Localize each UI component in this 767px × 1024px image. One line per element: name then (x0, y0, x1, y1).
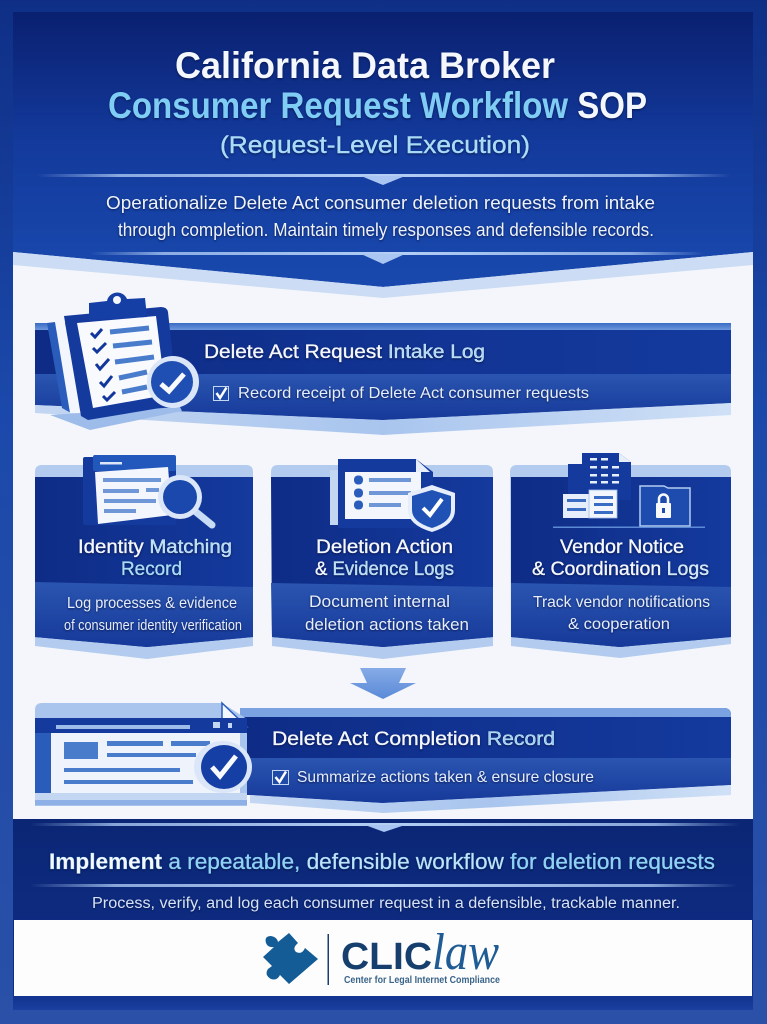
heading: Vendor Notice (560, 537, 684, 558)
panel: white content area (13, 252, 753, 820)
description (533, 594, 710, 633)
logo wordmark: CLIC (341, 936, 432, 978)
description: Log processes & evidence (67, 595, 237, 612)
panel: intake log (35, 293, 731, 435)
icon: document with magnifier (83, 455, 212, 525)
divider with pointer (30, 823, 740, 832)
logo tagline: Center for Legal Internet Compliance (344, 975, 500, 986)
icon: clipboard with checklist (47, 293, 199, 430)
logo wordmark italic: law (432, 924, 499, 981)
footer headline: Implement a repeatable, defensible workflow for deletion requests (49, 849, 715, 874)
intro text: through completion. Maintain timely responses and defensible records. (118, 220, 654, 240)
panel: completion record (35, 703, 731, 813)
subtitle: (Request-Level Execution) (220, 132, 530, 159)
description: of consumer identity verification (64, 618, 242, 634)
intro text (106, 193, 655, 240)
icon: checkbox (214, 386, 228, 400)
icon: puzzle piece (263, 933, 318, 984)
description (305, 593, 469, 634)
divider with pointer (37, 174, 731, 185)
divider with pointer (90, 252, 705, 264)
heading line 2: & Coordination Logs (532, 559, 709, 580)
heading: Deletion Action (316, 537, 453, 558)
description: Summarize actions taken & ensure closure (297, 769, 594, 786)
description (64, 595, 242, 634)
panel: identity matching (35, 455, 253, 659)
icon: checkbox (272, 770, 288, 784)
footer text: Process, verify, and log each consumer request in a defensible, trackable manner. (92, 895, 680, 912)
panel: footer (13, 819, 753, 1010)
description: Track vendor notifications (533, 594, 710, 611)
description: Document internal (309, 593, 450, 611)
description: deletion actions taken (305, 616, 469, 634)
title (108, 45, 647, 126)
description: Record receipt of Delete Act consumer requests (238, 385, 589, 402)
title: California Data Broker (175, 45, 555, 86)
arrow: down to completion (350, 668, 416, 699)
panel: header (13, 12, 753, 302)
heading: Delete Act Completion Record (272, 729, 555, 750)
description: & cooperation (568, 616, 670, 633)
panel: deletion action (271, 459, 493, 659)
intro text: Operationalize Delete Act consumer deletion requests from intake (106, 193, 655, 213)
panel: logo (14, 920, 752, 996)
heading line 2: & Evidence Logs (315, 559, 454, 580)
heading line 2: Record (121, 559, 182, 580)
icon: document with check badge (35, 703, 252, 806)
heading: Identity Matching (78, 537, 232, 558)
heading: Delete Act Request Intake Log (204, 342, 485, 363)
icon: building, documents and locked folder (553, 453, 705, 528)
panel: vendor notice (510, 453, 731, 658)
icon: document with shield (330, 459, 455, 532)
title: Consumer Request Workflow SOP (108, 85, 647, 126)
